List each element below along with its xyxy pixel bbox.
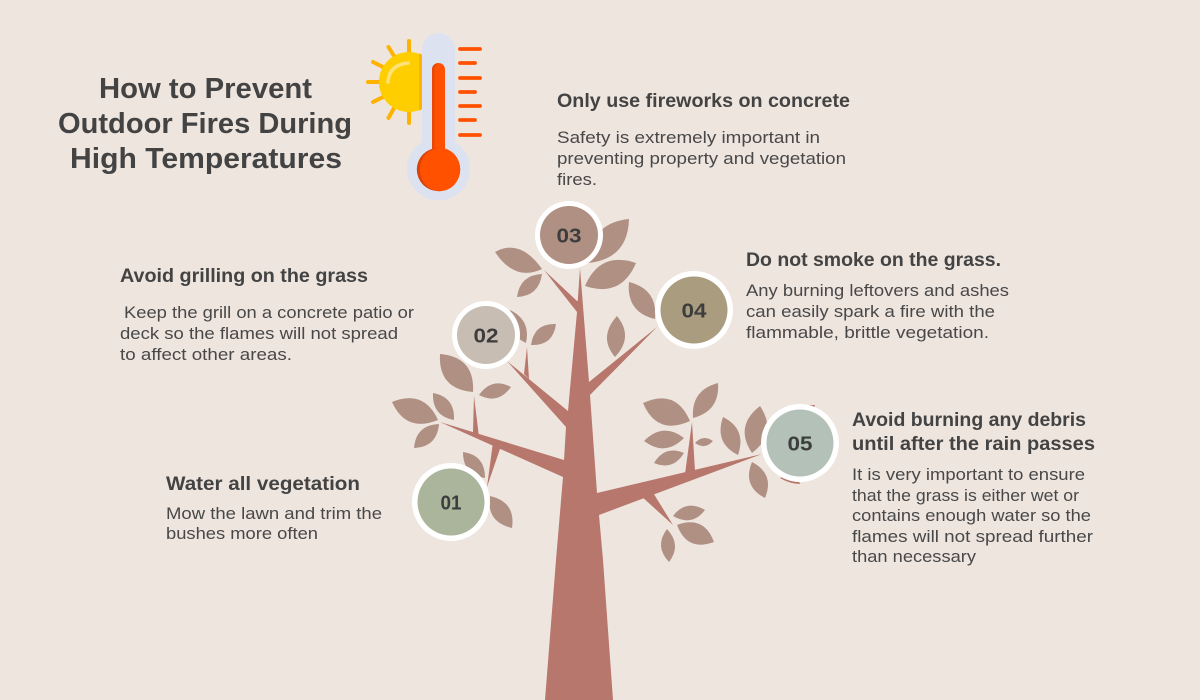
text block: avoid grilling on the grass: Keep the grill on a concrete patio or bbox=[124, 303, 414, 322]
tree trunk and branches bbox=[440, 268, 815, 700]
title: How to Prevent bbox=[99, 73, 312, 105]
tree leaves bbox=[392, 219, 768, 562]
step 01 marker bbox=[412, 463, 490, 541]
text block: only use fireworks on concrete: Only use fireworks on concrete bbox=[557, 91, 850, 112]
text block: water all vegetation bbox=[166, 474, 382, 543]
title: Outdoor Fires During bbox=[58, 108, 352, 140]
text block: avoid grilling on the grass: to affect other areas. bbox=[120, 345, 292, 364]
text block: avoid burning any debris: It is very important to ensure bbox=[852, 465, 1085, 484]
text block: do not smoke on the grass: Any burning leftovers and ashes bbox=[746, 281, 1009, 300]
tree illustration bbox=[392, 219, 815, 700]
step 03 marker: 03 bbox=[556, 224, 582, 248]
text block: water all vegetation: bushes more often bbox=[166, 524, 318, 543]
step 05 marker bbox=[761, 404, 839, 482]
text block: avoid grilling on the grass: deck so the flames will not spread bbox=[120, 324, 398, 343]
text block: do not smoke on the grass: Do not smoke on the grass. bbox=[746, 250, 1001, 271]
icon: temperature scale ticks bbox=[460, 49, 480, 135]
text block: avoid burning any debris: flames will not spread further bbox=[852, 527, 1093, 546]
text block: avoid grilling on the grass bbox=[120, 266, 414, 364]
text block: do not smoke on the grass: can easily spark a fire with the bbox=[746, 302, 995, 321]
step 05 marker: 05 bbox=[788, 432, 812, 456]
text block: do not smoke on the grass: flammable, brittle vegetation. bbox=[746, 323, 989, 342]
step 04 marker bbox=[655, 271, 733, 349]
text block: only use fireworks on concrete: preventing property and vegetation bbox=[557, 149, 846, 168]
icon: thermometer bbox=[407, 33, 470, 200]
text block: avoid burning any debris bbox=[852, 410, 1095, 566]
text block: only use fireworks on concrete bbox=[557, 91, 850, 189]
text block: avoid grilling on the grass: Avoid grilling on the grass bbox=[120, 266, 368, 287]
step 02 marker: 02 bbox=[474, 324, 498, 348]
text block: avoid burning any debris: until after the rain passes bbox=[852, 434, 1095, 455]
text block: avoid burning any debris: that the grass is either wet or bbox=[852, 486, 1079, 505]
icon: sun and thermometer bbox=[368, 33, 480, 200]
title bbox=[58, 73, 352, 175]
text block: do not smoke on the grass bbox=[746, 250, 1009, 342]
step 02 marker bbox=[452, 301, 520, 369]
text block: avoid burning any debris: than necessary bbox=[852, 547, 977, 566]
text block: only use fireworks on concrete: fires. bbox=[557, 170, 597, 189]
text block: avoid burning any debris: contains enough water so the bbox=[852, 506, 1091, 525]
icon: sun bbox=[368, 41, 422, 123]
title: High Temperatures bbox=[70, 143, 342, 175]
step 01 marker: 01 bbox=[440, 492, 462, 514]
text block: water all vegetation: Mow the lawn and trim the bbox=[166, 504, 382, 523]
text block: only use fireworks on concrete: Safety is extremely important in bbox=[557, 128, 820, 147]
text block: water all vegetation: Water all vegetation bbox=[166, 474, 360, 495]
text block: avoid burning any debris: Avoid burning any debris bbox=[852, 410, 1086, 431]
step 03 marker bbox=[535, 201, 603, 269]
step 04 marker: 04 bbox=[682, 300, 707, 322]
